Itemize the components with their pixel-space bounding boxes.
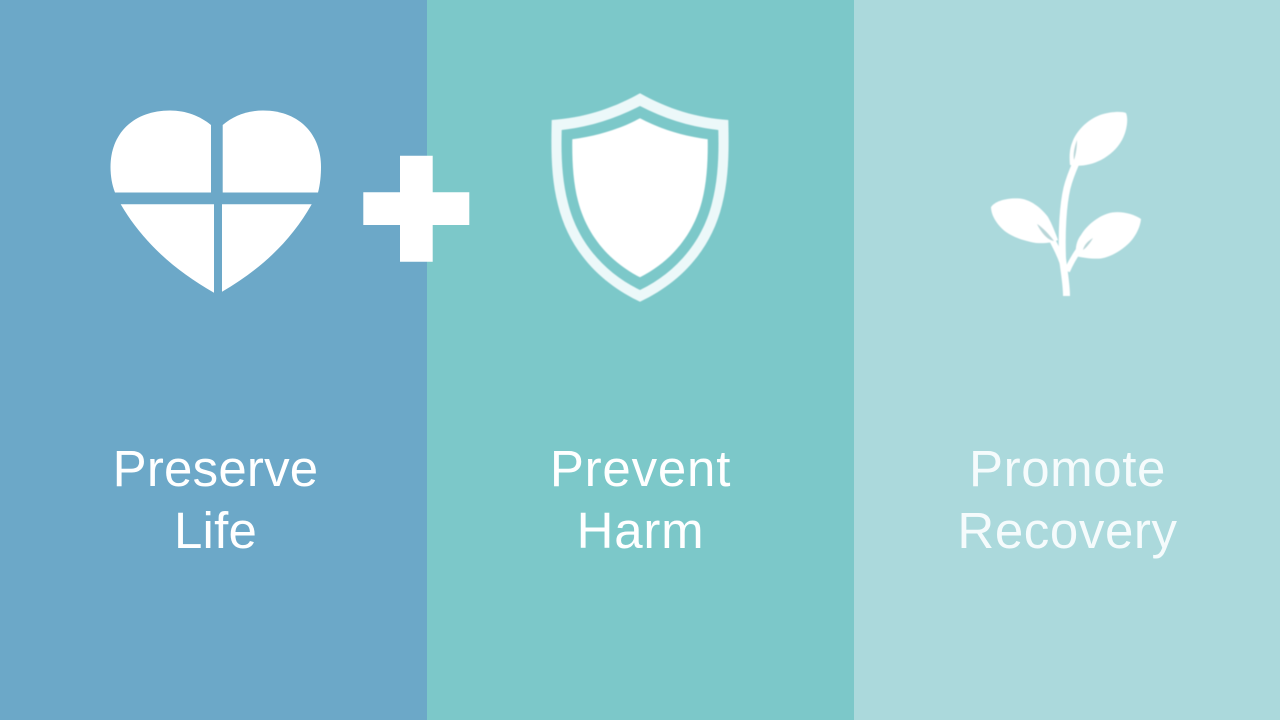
label: Preserve Life: Life — [174, 502, 257, 559]
label: Promote Recovery: Promote — [969, 440, 1166, 497]
label: Promote Recovery — [957, 440, 1178, 559]
label: Promote Recovery: Recovery — [957, 502, 1178, 559]
label: Prevent Harm — [550, 440, 731, 559]
label: Preserve Life: Preserve — [113, 440, 318, 497]
label: Prevent Harm: Harm — [577, 502, 704, 559]
panel: prevent harm — [427, 0, 854, 720]
label: Prevent Harm: Prevent — [550, 440, 731, 497]
panel: preserve life — [0, 0, 427, 720]
panel: promote recovery — [854, 0, 1280, 720]
label: Preserve Life — [113, 440, 318, 559]
